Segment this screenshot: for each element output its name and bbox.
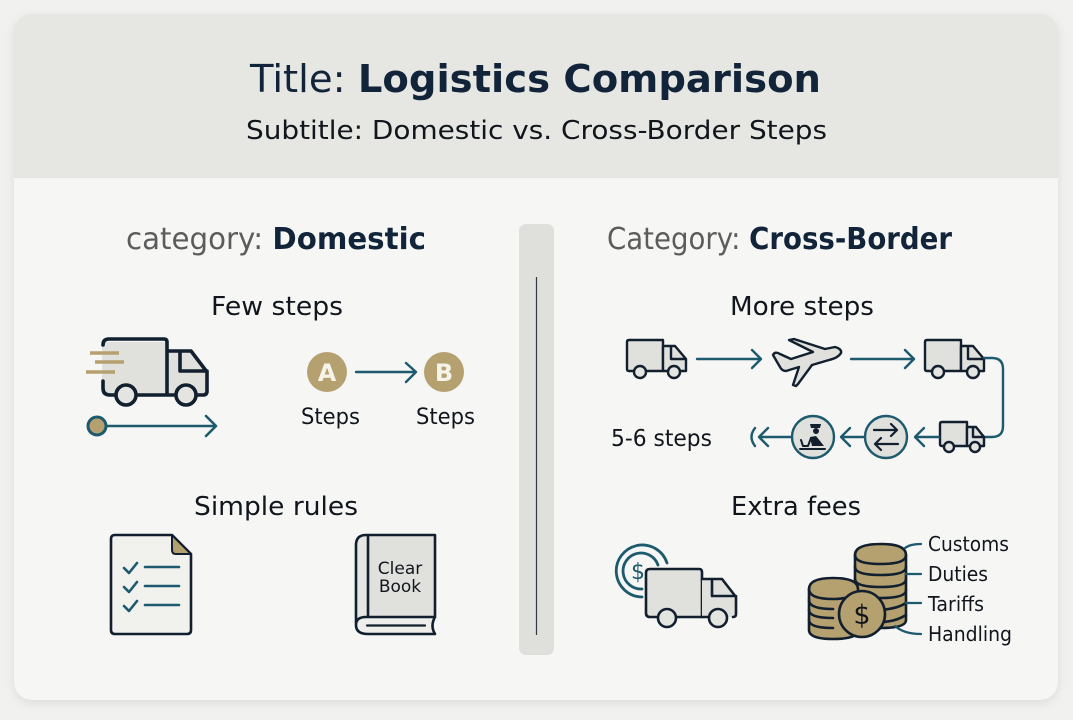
icon: truck 3 bbox=[940, 422, 984, 452]
icon: exchange circle bbox=[865, 416, 907, 458]
arrow: direct route bbox=[88, 416, 216, 436]
icon: airplane bbox=[773, 339, 841, 386]
icon: coin stacks with fee labels: $ bbox=[853, 600, 871, 631]
arrow: plane to truck bbox=[851, 350, 914, 368]
arrow: customs to delivery bbox=[752, 428, 791, 446]
arrow: connector down to return leg bbox=[984, 358, 1003, 437]
A to B route bbox=[307, 352, 464, 392]
label: steps B: Steps bbox=[416, 405, 475, 430]
A to B route: B bbox=[435, 359, 453, 387]
A to B route: A bbox=[318, 359, 337, 387]
heading: more steps: More steps bbox=[730, 292, 874, 322]
icon: clear book: Book bbox=[379, 577, 421, 597]
header band bbox=[14, 14, 1058, 178]
icon: customs officer circle bbox=[792, 416, 834, 458]
icon: fee truck with dollar ripple: $ bbox=[631, 560, 645, 585]
label: steps A: Steps bbox=[301, 405, 360, 430]
central divider bbox=[519, 224, 554, 655]
heading: few steps: Few steps bbox=[211, 292, 343, 322]
heading: extra fees: Extra fees bbox=[731, 492, 861, 522]
icon: clear book: Clear bbox=[378, 559, 422, 579]
arrow: exchange to customs bbox=[841, 428, 865, 446]
subtitle: Subtitle: Domestic vs. Cross-Border Steps bbox=[246, 116, 827, 146]
label: 5-6 steps: 5-6 steps bbox=[611, 426, 712, 452]
label: customs: Customs bbox=[928, 532, 1009, 556]
heading: domestic category: category: Domestic bbox=[126, 222, 426, 257]
icon: coin stacks with fee labels bbox=[809, 544, 921, 639]
icon: clear book bbox=[356, 535, 435, 634]
arrow: truck to exchange bbox=[915, 428, 939, 446]
label: handling: Handling bbox=[928, 622, 1012, 646]
icon: fast delivery truck bbox=[86, 339, 207, 405]
arrow: truck to plane bbox=[697, 350, 761, 368]
icon: checklist bbox=[111, 535, 191, 634]
title: Title: Logistics Comparison bbox=[249, 57, 821, 101]
heading: cross-border category: Category: Cross-Border bbox=[607, 222, 952, 257]
icon: truck 2 bbox=[925, 340, 984, 378]
label: tariffs: Tariffs bbox=[927, 592, 984, 616]
label: duties: Duties bbox=[928, 562, 988, 586]
icon: truck 1 bbox=[627, 340, 686, 378]
icon: fee truck with dollar ripple bbox=[616, 545, 736, 627]
heading: simple rules: Simple rules bbox=[194, 492, 358, 522]
